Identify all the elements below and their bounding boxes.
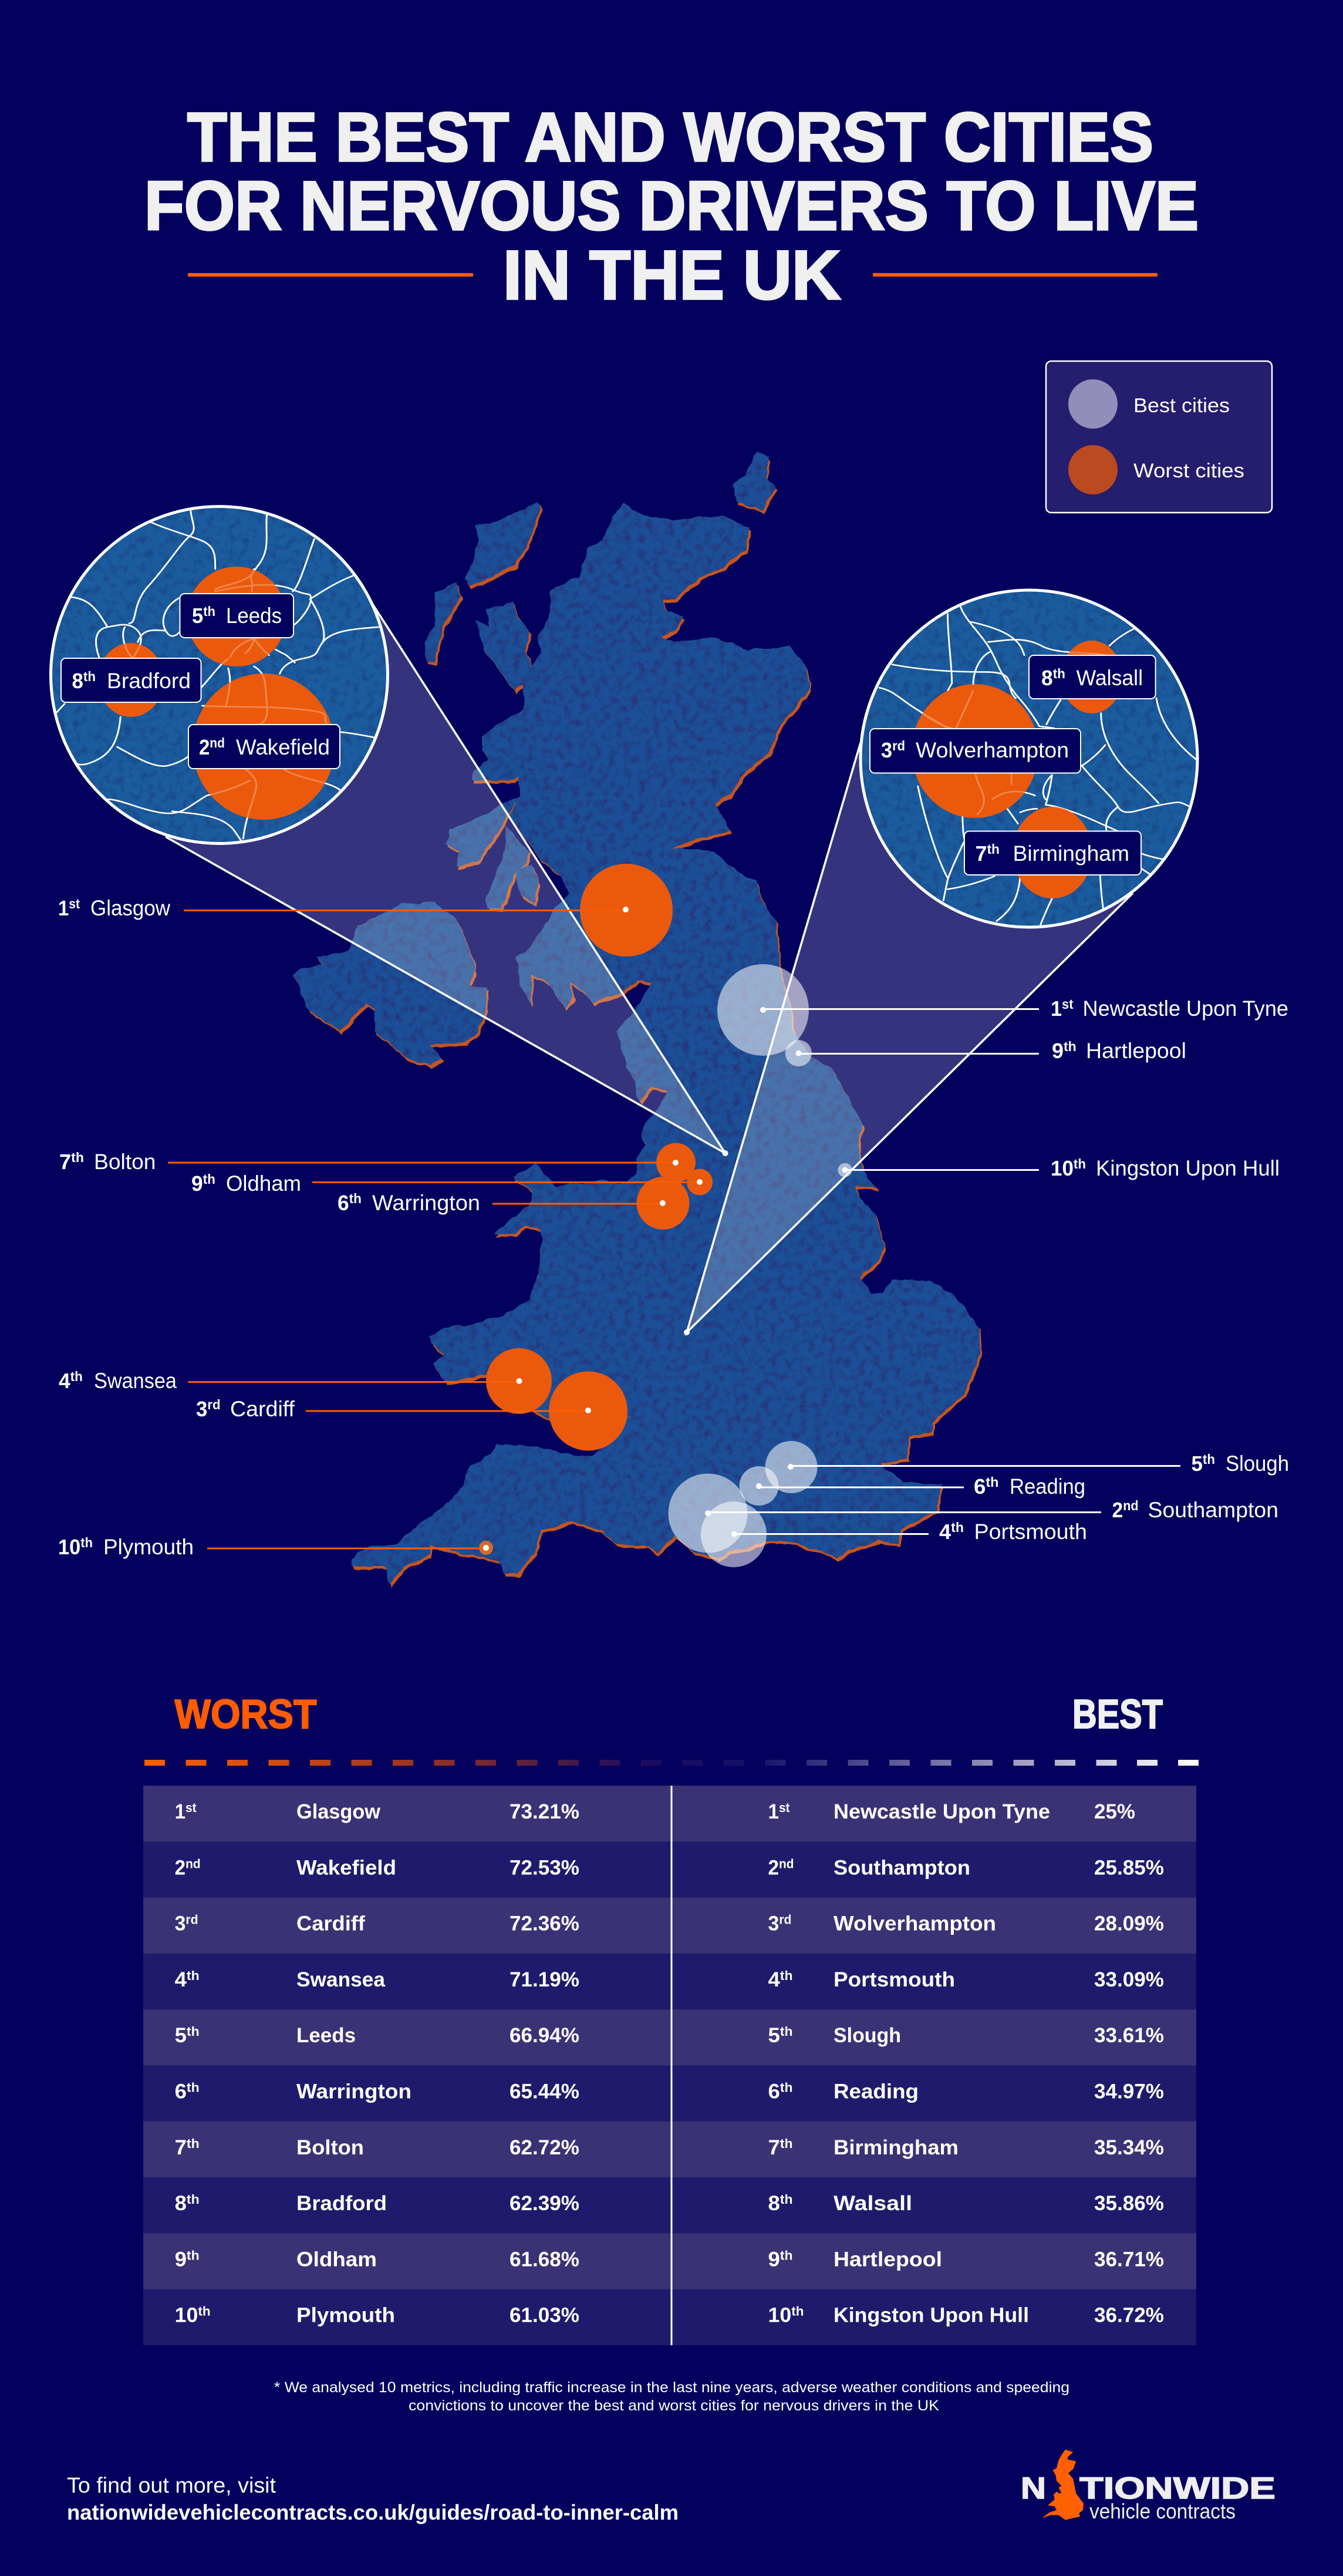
- label: Birmingham: Birmingham: [1013, 841, 1129, 866]
- table: worst column: 66.94%: [509, 2024, 579, 2047]
- table: worst column: th: [187, 2192, 200, 2207]
- map labels: best cities: [939, 996, 1289, 1544]
- table: best column: 2: [768, 1856, 780, 1879]
- table: best column: Birmingham: [834, 2136, 959, 2159]
- table: worst column: 73.21%: [509, 1800, 579, 1823]
- table: worst column: rd: [185, 1912, 198, 1927]
- table: worst column: 71.19%: [509, 1968, 579, 1991]
- map labels: worst cities: [58, 896, 480, 1559]
- table: worst column: Oldham: [296, 2248, 377, 2271]
- table: worst column: th: [187, 2024, 200, 2039]
- table: best column: 1: [768, 1800, 780, 1823]
- map labels: worst cities: rd: [207, 1397, 221, 1412]
- table: worst column: th: [187, 1968, 200, 1983]
- table: worst column: th: [198, 2304, 211, 2319]
- lens: West Midlands cities: [861, 590, 1197, 927]
- map labels: worst cities: st: [69, 896, 80, 911]
- map labels: best cities: 10: [1051, 1156, 1074, 1180]
- map labels: best cities: Hartlepool: [1086, 1039, 1186, 1063]
- table: best column: Reading: [834, 2080, 919, 2103]
- logo: Nationwide Vehicle Contracts: N: [1021, 2471, 1046, 2506]
- title: [144, 99, 1199, 314]
- zoom wedge: West Midlands: [687, 743, 1133, 1332]
- table: best column: 5: [768, 2024, 780, 2047]
- label: Leeds: th: [203, 604, 215, 619]
- map labels: best cities: th: [1074, 1156, 1086, 1171]
- call to action: nationwidevehiclecontracts.co.uk/guides/road-to-inner-calm: [67, 2500, 679, 2524]
- table: best column: th: [780, 2024, 792, 2039]
- map labels: worst cities: Oldham: [226, 1171, 301, 1196]
- map labels: worst cities: 4: [59, 1369, 70, 1393]
- table: worst column: [175, 1800, 579, 2327]
- table: best column: 36.72%: [1094, 2304, 1164, 2327]
- table: worst column: th: [187, 2136, 200, 2151]
- label: Walsall: th: [1053, 666, 1065, 681]
- label: Wolverhampton: rd: [892, 738, 905, 753]
- map labels: best cities: th: [986, 1474, 999, 1490]
- table: best column: 35.34%: [1094, 2136, 1164, 2159]
- map labels: best cities: 6: [974, 1474, 986, 1499]
- label: Leeds: 5: [192, 604, 204, 628]
- map labels: best cities: Newcastle Upon Tyne: [1082, 996, 1288, 1021]
- table: worst column: 8: [175, 2192, 186, 2215]
- map labels: worst cities: Swansea: [94, 1369, 177, 1393]
- table: best column: 10: [768, 2304, 791, 2327]
- label: Wakefield: [188, 725, 340, 769]
- label: Leeds: Leeds: [226, 604, 282, 628]
- label: Wakefield: Wakefield: [236, 735, 330, 759]
- table: best column: rd: [779, 1912, 791, 1927]
- table: best column: Newcastle Upon Tyne: [834, 1800, 1050, 1823]
- map labels: worst cities: 9: [191, 1171, 203, 1196]
- map labels: worst cities: th: [70, 1369, 83, 1384]
- table: best column: 33.09%: [1094, 1968, 1164, 1991]
- map labels: best cities: Kingston Upon Hull: [1096, 1156, 1280, 1180]
- footnote: convictions to uncover the best and worst cities for nervous drivers in the UK: [409, 2397, 939, 2414]
- label: Bradford: th: [83, 669, 96, 684]
- map labels: best cities: th: [1203, 1452, 1215, 1467]
- table: best column: nd: [779, 1856, 794, 1871]
- label: Wakefield: 2: [199, 735, 211, 759]
- table: best column: st: [779, 1800, 790, 1815]
- table: best column: 36.71%: [1094, 2248, 1164, 2271]
- label: Birmingham: 7: [976, 841, 987, 866]
- footnote: * We analysed 10 metrics, including traffic increase in the last nine years, adverse weather conditions and speeding: [274, 2379, 1069, 2396]
- legend: Worst cities: [1133, 460, 1244, 482]
- map labels: best cities: 2: [1112, 1498, 1124, 1522]
- map labels: best cities: 4: [939, 1520, 951, 1544]
- label: Bradford: [61, 658, 201, 702]
- table: best column: 4: [768, 1968, 780, 1991]
- label: Wolverhampton: [870, 729, 1081, 773]
- logo: Nationwide Vehicle Contracts: TIONWIDE: [1079, 2471, 1275, 2506]
- map labels: worst cities: th: [349, 1191, 362, 1206]
- heading: best: BEST: [1072, 1691, 1163, 1737]
- table: worst column: 62.39%: [509, 2192, 579, 2215]
- table: best column: Walsall: [834, 2192, 912, 2215]
- map labels: worst cities: 7: [59, 1150, 71, 1174]
- map labels: worst cities: th: [71, 1150, 84, 1165]
- map labels: best cities: th: [951, 1520, 964, 1535]
- best city circles: [668, 964, 852, 1567]
- map labels: worst cities: 3: [196, 1397, 208, 1421]
- title: FOR NERVOUS DRIVERS TO LIVE: [144, 167, 1199, 245]
- map labels: worst cities: 1: [58, 896, 70, 920]
- table: worst column: 72.53%: [509, 1856, 579, 1879]
- table: best column: th: [780, 1968, 792, 1983]
- label: Birmingham: [964, 831, 1141, 875]
- table: best column: Hartlepool: [834, 2248, 942, 2271]
- table: best column: 33.61%: [1094, 2024, 1164, 2047]
- map labels: best cities: Portsmouth: [974, 1520, 1087, 1544]
- ranking table: [143, 1786, 1196, 2345]
- table: worst column: 3: [175, 1912, 186, 1935]
- map labels: best cities: 9: [1052, 1039, 1064, 1063]
- legend: [1046, 361, 1272, 513]
- map labels: worst cities: Glasgow: [90, 896, 170, 920]
- map labels: worst cities: Warrington: [372, 1191, 480, 1215]
- heading: worst: WORST: [175, 1691, 317, 1737]
- call to action: [67, 2473, 679, 2524]
- table: worst column: 62.72%: [509, 2136, 579, 2159]
- table: worst column: 9: [175, 2248, 186, 2271]
- wedge outlines: [166, 601, 1133, 1332]
- table: worst column: 61.03%: [509, 2304, 579, 2327]
- table: worst column: Warrington: [296, 2080, 411, 2103]
- map labels: best cities: Reading: [1010, 1474, 1085, 1499]
- table: best column: 25%: [1094, 1800, 1135, 1823]
- map labels: worst cities: Bolton: [94, 1150, 156, 1174]
- table: worst column: 2: [175, 1856, 186, 1879]
- table: worst column: th: [187, 2080, 200, 2095]
- table: worst column: Wakefield: [296, 1856, 396, 1879]
- table: best column: 35.86%: [1094, 2192, 1164, 2215]
- table: worst column: 4: [175, 1968, 186, 1991]
- label: Walsall: Walsall: [1077, 666, 1143, 690]
- table: worst column: 10: [175, 2304, 198, 2327]
- map of the UK: [293, 453, 982, 1588]
- table: best column: 7: [768, 2136, 780, 2159]
- label: Wakefield: nd: [210, 735, 225, 750]
- table: best column: 25.85%: [1094, 1856, 1164, 1879]
- table: worst column: Swansea: [296, 1968, 386, 1991]
- map labels: best cities: 5: [1192, 1452, 1203, 1476]
- map labels: best cities: Slough: [1226, 1452, 1289, 1476]
- label: Bradford: Bradford: [107, 669, 191, 693]
- table: worst column: 61.68%: [509, 2248, 579, 2271]
- table: worst column: st: [185, 1800, 197, 1815]
- logo: Nationwide Vehicle Contracts: vehicle contracts: [1089, 2499, 1236, 2523]
- legend: Best cities: [1133, 395, 1230, 417]
- table: worst column: 7: [175, 2136, 186, 2159]
- table: best column: th: [780, 2248, 792, 2262]
- zoom wedge: Yorkshire: [166, 601, 726, 1153]
- table: worst column: 5: [175, 2024, 186, 2047]
- map labels: worst cities: Plymouth: [103, 1535, 194, 1559]
- table: worst column: Glasgow: [296, 1800, 381, 1823]
- table: best column: th: [791, 2304, 804, 2319]
- map labels: worst cities: th: [80, 1535, 93, 1550]
- label: Birmingham: th: [987, 841, 1000, 857]
- table: best column: th: [780, 2136, 792, 2151]
- label: Leeds: [180, 594, 293, 638]
- map labels: best cities: nd: [1123, 1498, 1139, 1513]
- table: best column: Kingston Upon Hull: [834, 2304, 1029, 2327]
- table: best column: Slough: [834, 2024, 901, 2047]
- map labels: best cities: 1: [1051, 996, 1062, 1021]
- label: Walsall: 8: [1041, 666, 1053, 690]
- table: worst column: th: [187, 2248, 200, 2262]
- leader lines and dots: [168, 907, 1180, 1551]
- label: Walsall: [1029, 655, 1156, 699]
- table: worst column: 72.36%: [509, 1912, 579, 1935]
- table: worst column: Leeds: [296, 2024, 356, 2047]
- label: Wolverhampton: Wolverhampton: [916, 738, 1069, 762]
- map labels: worst cities: 10: [58, 1535, 82, 1559]
- map labels: worst cities: Cardiff: [230, 1397, 295, 1421]
- table: worst column: 6: [175, 2080, 186, 2103]
- map labels: best cities: th: [1064, 1039, 1077, 1054]
- table: best column: [768, 1800, 1164, 2327]
- table: best column: Southampton: [834, 1856, 970, 1879]
- table: best column: 6: [768, 2080, 780, 2103]
- table: best column: Portsmouth: [834, 1968, 955, 1991]
- footnote: [274, 2379, 1069, 2414]
- logo: Nationwide Vehicle Contracts: [1021, 2450, 1275, 2523]
- table: best column: th: [780, 2080, 792, 2095]
- lens: Yorkshire cities: [50, 506, 387, 843]
- map labels: worst cities: 6: [338, 1191, 349, 1215]
- label: Wolverhampton: 3: [881, 738, 893, 762]
- table: best column: Wolverhampton: [834, 1912, 996, 1935]
- table: worst column: Plymouth: [296, 2304, 395, 2327]
- table: worst column: 65.44%: [509, 2080, 579, 2103]
- title: IN THE UK: [503, 237, 841, 314]
- table: worst column: 1: [175, 1800, 186, 1823]
- label: Bradford: 8: [72, 669, 84, 693]
- map labels: best cities: st: [1062, 996, 1074, 1012]
- table: worst column: Bradford: [296, 2192, 387, 2215]
- table: worst column: nd: [185, 1856, 201, 1871]
- table: best column: 8: [768, 2192, 780, 2215]
- table: worst column: Bolton: [296, 2136, 364, 2159]
- call to action: To find out more, visit: [67, 2473, 276, 2497]
- table: best column: 9: [768, 2248, 780, 2271]
- map labels: worst cities: th: [203, 1171, 215, 1187]
- table: best column: th: [780, 2192, 792, 2207]
- table: best column: 34.97%: [1094, 2080, 1164, 2103]
- table: best column: 3: [768, 1912, 780, 1935]
- table: best column: 28.09%: [1094, 1912, 1164, 1935]
- map labels: best cities: Southampton: [1148, 1498, 1278, 1522]
- title: THE BEST AND WORST CITIES: [187, 99, 1153, 176]
- worst city circles: [479, 864, 713, 1555]
- table: worst column: Cardiff: [296, 1912, 365, 1935]
- dashed gradient divider: [144, 1760, 1199, 1766]
